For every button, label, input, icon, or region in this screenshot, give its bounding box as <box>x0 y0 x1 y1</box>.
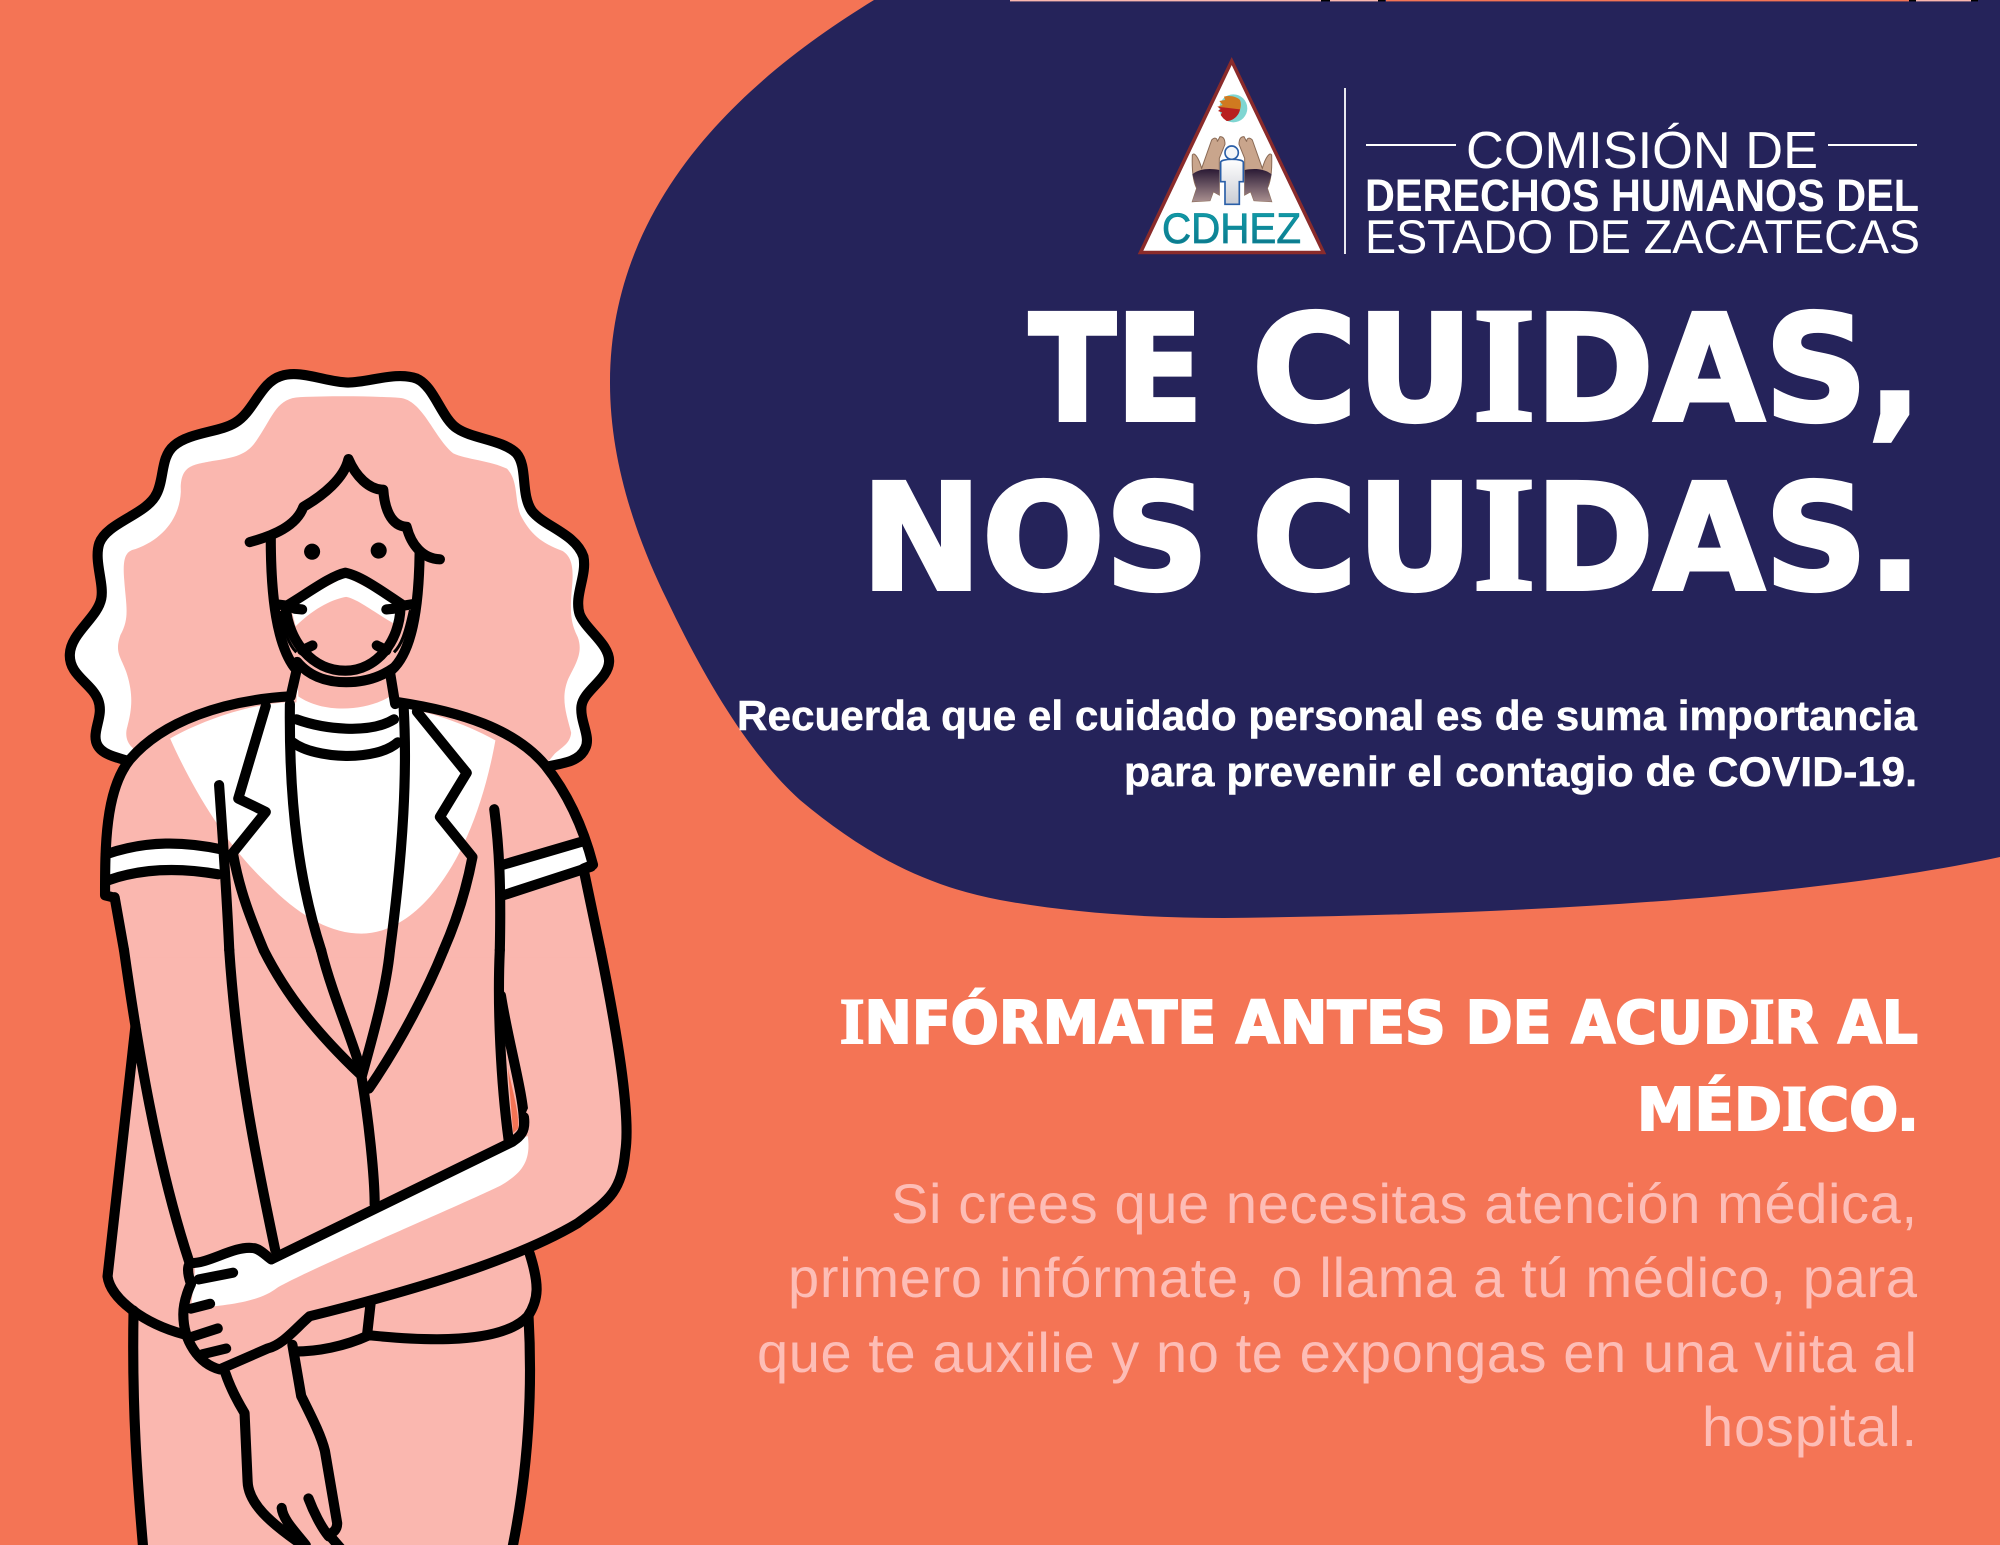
body text <box>757 1172 1918 1458</box>
illustration: woman with face mask <box>70 374 627 1545</box>
subtitle <box>737 692 1918 795</box>
mask highlight <box>291 577 402 626</box>
gap behind elbow <box>508 1068 518 1133</box>
title line 2: NOS <box>861 453 1209 624</box>
logo: CDHEZ triangle <box>1140 61 1324 253</box>
title <box>861 275 1922 625</box>
logo triangle <box>1140 61 1324 252</box>
body and clothes <box>105 668 606 962</box>
lower body, arms and hands <box>107 950 627 1545</box>
neck and collar <box>294 687 394 752</box>
face <box>250 459 440 682</box>
title line 1: CUIDAS, <box>1252 275 1922 456</box>
sleeve bands <box>106 844 222 880</box>
title line 2 <box>861 444 1922 625</box>
section heading: INFÓRMATE ANTES DE ACUDIR AL <box>840 986 1918 1058</box>
section heading <box>840 986 1919 1145</box>
title line 1: TE <box>1029 284 1203 455</box>
organisation name: COMISIÓN DE <box>1466 122 1818 180</box>
forearm highlight <box>191 1136 528 1309</box>
body text: primero infórmate, o llama a tú médico, para <box>788 1246 1918 1309</box>
title line 2: CUIDAS. <box>1252 444 1922 625</box>
organisation name <box>1365 122 1920 263</box>
forearm <box>183 950 627 1369</box>
organisation name: DERECHOS HUMANOS DEL <box>1365 170 1919 221</box>
top edge strip <box>1010 0 1978 1</box>
logo divider <box>1344 88 1346 254</box>
body text: Si crees que necesitas atención médica, <box>891 1172 1917 1235</box>
section heading: MÉDICO. <box>1637 1073 1919 1145</box>
organisation name: ESTADO DE ZACATECAS <box>1365 210 1920 263</box>
body text: que te auxilie y no te expongas en una viita al <box>757 1321 1917 1384</box>
navy blob panel <box>610 0 2000 918</box>
body text: hospital. <box>1702 1395 1917 1458</box>
eyes <box>304 542 387 560</box>
subtitle: Recuerda que el cuidado personal es de suma importancia <box>737 692 1918 739</box>
subtitle: para prevenir el contagio de COVID-19. <box>1124 748 1917 795</box>
logo icons: sun, hands and person <box>1192 94 1272 204</box>
lower hand <box>225 1373 298 1542</box>
hair <box>70 374 609 771</box>
logo initials: CDHEZ <box>1162 205 1301 253</box>
